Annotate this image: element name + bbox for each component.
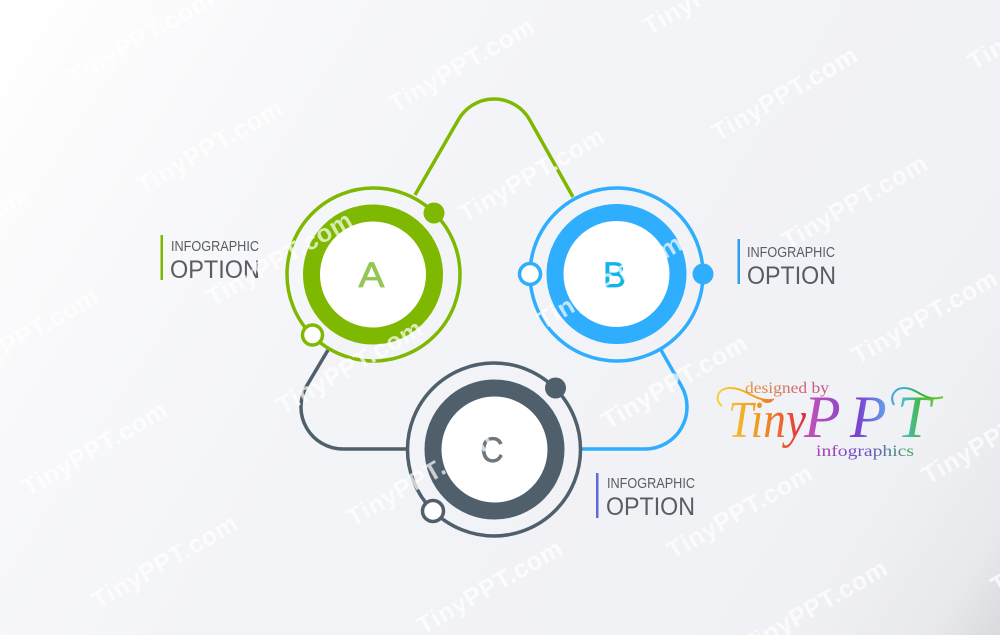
label A xyxy=(160,235,260,284)
node A thick ring xyxy=(312,213,434,336)
logo wordmark: Tiny: Tiny xyxy=(728,392,807,449)
node C thick ring xyxy=(433,388,556,511)
node B thick ring xyxy=(555,212,678,336)
node B outer ring xyxy=(530,188,703,361)
label C: INFOGRAPHIC xyxy=(607,476,695,492)
node B xyxy=(520,188,714,361)
node C xyxy=(408,363,580,536)
watermarks: TinyPPT.com xyxy=(87,509,243,615)
watermarks: TinyPPT.com xyxy=(17,396,173,502)
node C letter: C xyxy=(480,431,504,470)
label B: INFOGRAPHIC xyxy=(747,245,835,261)
logo: designed by TinyPPT infographics xyxy=(718,380,943,460)
logo swash: first T top xyxy=(718,388,772,406)
label A: OPTION xyxy=(170,256,260,284)
label C: OPTION xyxy=(606,493,695,521)
watermarks: TinyPPT.com xyxy=(707,41,863,147)
logo wordmark: PPT: PPT xyxy=(803,384,934,450)
watermarks: TinyPPT.com xyxy=(132,94,288,200)
node C outer ring xyxy=(408,363,580,536)
label B xyxy=(738,239,836,290)
connector: slate line from A to C xyxy=(301,350,407,449)
label A: INFOGRAPHIC xyxy=(171,239,259,255)
connector: green line from A to B xyxy=(415,99,573,197)
node C hollow dot xyxy=(422,500,444,522)
node A hollow dot xyxy=(302,325,322,345)
logo caption: infographics: infographics xyxy=(816,443,914,460)
label C xyxy=(596,473,695,521)
node B filled dot xyxy=(692,264,714,284)
watermarks: TinyPPT.com xyxy=(342,426,498,532)
connector: blue line from B to C xyxy=(582,350,687,449)
watermarks: TinyPPT.com xyxy=(597,329,753,435)
node C filled dot xyxy=(545,378,566,398)
node A filled dot xyxy=(424,202,444,224)
watermarks: TinyPPT.com xyxy=(777,149,933,255)
watermarks: TinyPPT.com xyxy=(847,264,1000,370)
node A letter: A xyxy=(358,256,385,295)
watermarks: TinyPPT.com xyxy=(202,206,358,312)
watermarks: TinyPPT.com xyxy=(454,122,610,228)
node A xyxy=(287,188,460,361)
logo swash: last T top xyxy=(892,388,943,405)
watermarks: TinyPPT.com xyxy=(272,314,428,420)
node B letter: B xyxy=(603,256,626,295)
watermarks: TinyPPT.com xyxy=(532,229,688,335)
watermarks: TinyPPT.com xyxy=(662,459,818,565)
node A outer ring xyxy=(287,188,460,361)
logo caption: designed by: designed by xyxy=(745,380,829,397)
watermarks: TinyPPT.com xyxy=(384,12,540,118)
node B hollow dot xyxy=(520,264,540,284)
label B: OPTION xyxy=(747,262,836,290)
